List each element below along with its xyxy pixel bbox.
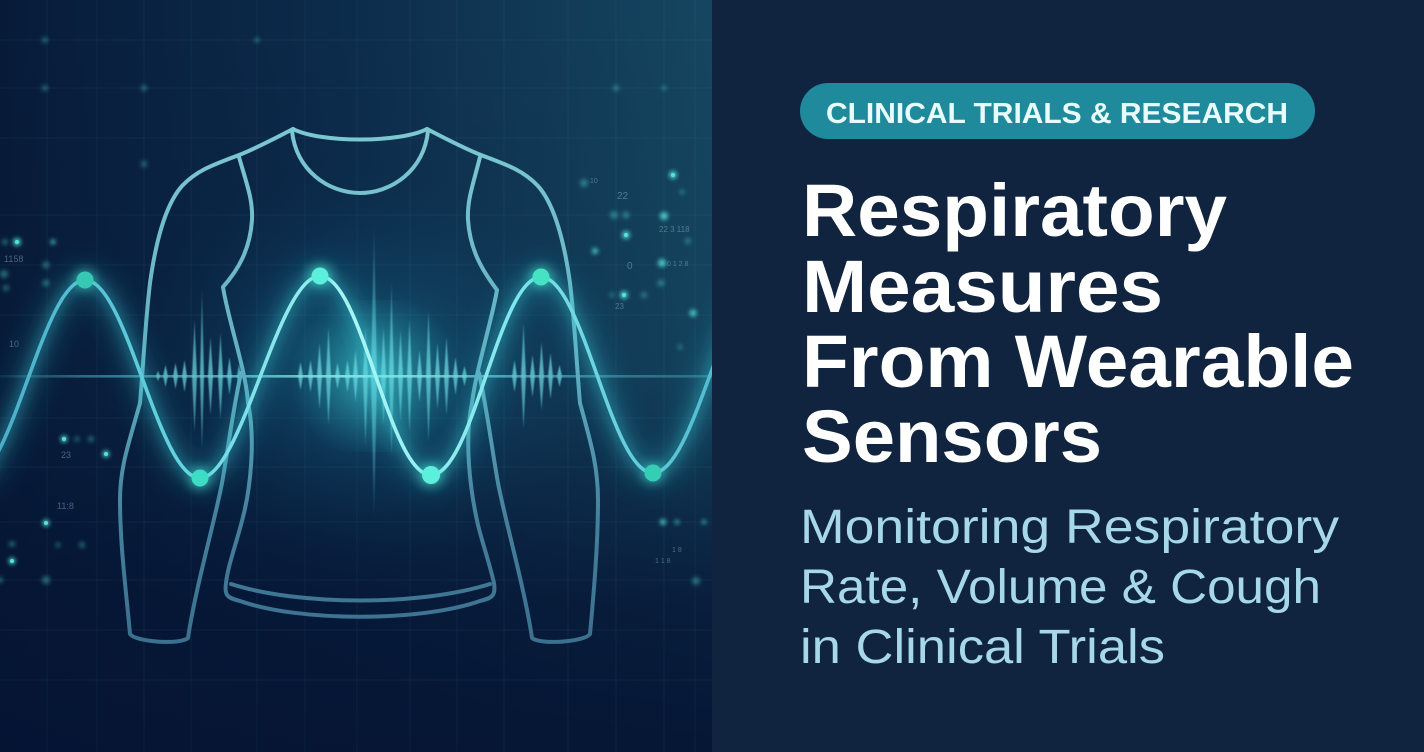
- small data labels: 10: [590, 178, 598, 185]
- category pill: [800, 83, 1315, 139]
- small data labels: 10: [9, 339, 19, 349]
- small data labels: 22 3 118: [659, 225, 690, 234]
- category pill: CLINICAL TRIALS & RESEARCH: [826, 98, 1288, 130]
- wave peak and trough nodes: [76, 265, 662, 488]
- waveform centre line and cough bursts: [0, 223, 712, 521]
- title: [802, 169, 1354, 478]
- small data labels: 23: [615, 302, 624, 311]
- title: Respiratory: [802, 169, 1227, 252]
- small data labels: 1 8: [672, 547, 682, 554]
- subtitle: in Clinical Trials: [800, 621, 1165, 674]
- small data labels: 22: [617, 191, 629, 202]
- small data labels: 1158: [4, 254, 23, 264]
- small data labels: 1 1 8: [655, 558, 671, 565]
- shirt neckline: [292, 129, 428, 193]
- small data labels: [4, 178, 690, 565]
- subtitle: Monitoring Respiratory: [800, 501, 1339, 554]
- subtitle: [800, 501, 1339, 674]
- panel background: [712, 0, 1424, 752]
- title: Sensors: [802, 395, 1102, 478]
- small data labels: 0 1 2 8: [667, 261, 689, 268]
- title: Measures: [802, 245, 1163, 328]
- small data labels: 23: [61, 450, 71, 460]
- panel: left illustration: [0, 0, 766, 752]
- background gradient: [0, 0, 712, 752]
- panel: right text: [712, 0, 1424, 752]
- icon: long-sleeve shirt outline: [120, 129, 598, 642]
- title: From Wearable: [802, 320, 1354, 403]
- small data labels: 0: [627, 261, 633, 272]
- respiratory wave: [0, 276, 766, 480]
- small data labels: 11:8: [57, 501, 74, 511]
- subtitle: Rate, Volume & Cough: [800, 561, 1321, 614]
- shirt outer shoulders and sleeves: [120, 129, 598, 642]
- shirt hem: [231, 584, 490, 600]
- data dots: [0, 37, 706, 585]
- shirt body: [223, 157, 497, 617]
